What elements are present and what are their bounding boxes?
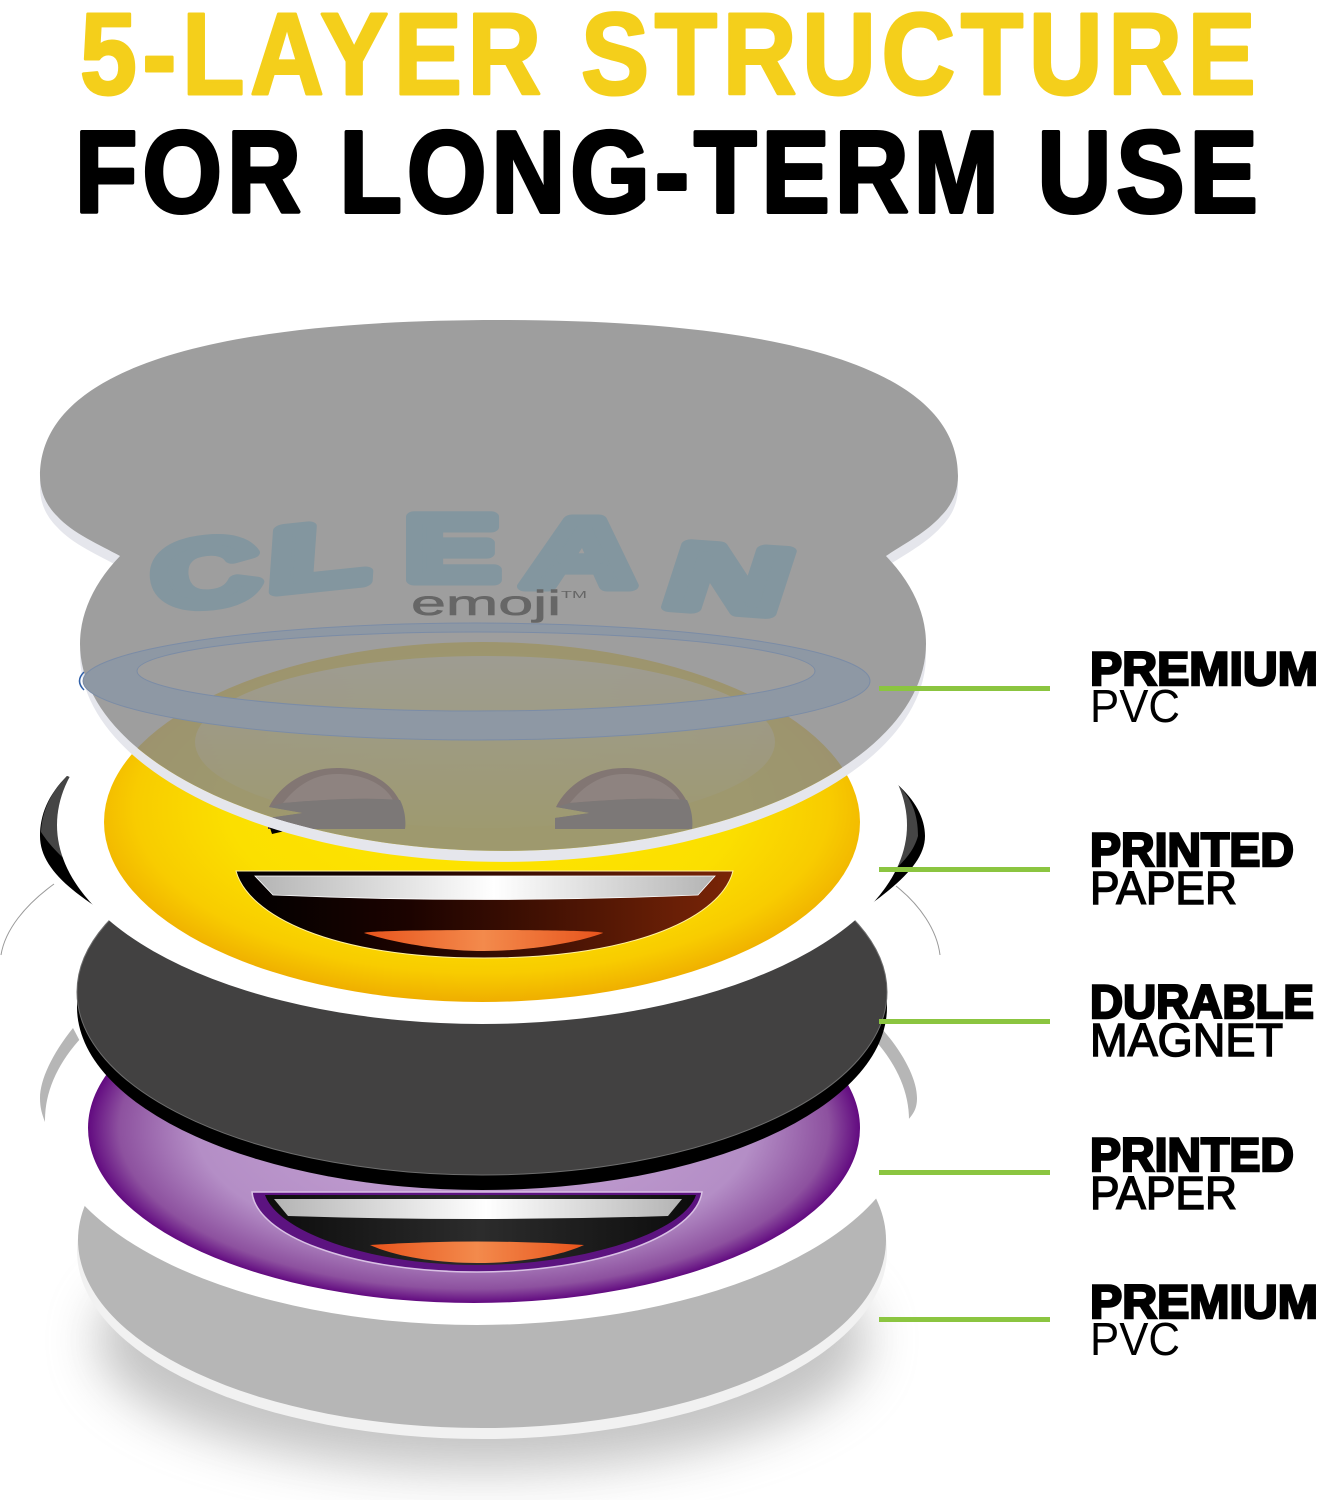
label: printed paper [1090,1128,1294,1219]
layer stack illustration [1,320,958,1470]
PVC edge lip [40,482,958,862]
layer 2: printed yellow face [57,626,907,1024]
label: printed paper: PAPER [1090,1167,1237,1219]
right eye [555,768,692,829]
CLEAN wordmark: C [147,517,264,630]
layer 1: top clear PVC [40,320,958,862]
halo ring [83,623,870,740]
label: printed paper: PRINTED [1090,823,1294,876]
label: printed paper [1090,823,1294,914]
translucent PVC sheet [40,320,958,851]
emoji logo: TM [561,590,587,601]
label: durable magnet [1090,975,1314,1066]
CLEAN wordmark [147,498,804,634]
title line: for long-term use: FOR LONG-TERM USE [75,108,1258,237]
yellow mouth [236,871,733,958]
layer 5: bottom PVC [40,1028,917,1439]
back sticker edges behind yellow face [40,776,925,917]
purple mouth [252,1192,702,1272]
label: printed paper: PRINTED [1090,1128,1294,1181]
thin outline arcs behind printed paper [1,884,940,955]
label: printed paper: PAPER [1090,862,1237,914]
layer 4: printed purple face [45,915,909,1325]
label: durable magnet: MAGNET [1090,1014,1283,1066]
left eye [268,768,405,829]
small black tip [270,828,285,834]
side crescents of bottom PVC sticker [40,1028,917,1122]
CLEAN wordmark: A [520,500,643,607]
label: premium PVC: PREMIUM [1090,642,1318,695]
label: premium PVC: PVC [1090,680,1180,732]
leader lines [879,686,1050,1322]
label: durable magnet: DURABLE [1090,975,1314,1028]
CLEAN wordmark: E [405,498,499,600]
drop shadow [97,1210,867,1470]
emoji logo: emoji [411,584,495,623]
label: premium PVC [1090,642,1318,732]
label: premium PVC: PREMIUM [1090,1275,1318,1328]
blue arc at halo edge [80,672,84,690]
CLEAN wordmark: L [267,501,373,611]
label: premium PVC [1090,1275,1318,1365]
label: premium PVC: PVC [1090,1313,1180,1365]
CLEAN wordmark: N [654,524,804,634]
title [75,0,1258,237]
layer 3: durable magnet [77,809,887,1190]
face highlight [195,656,775,828]
